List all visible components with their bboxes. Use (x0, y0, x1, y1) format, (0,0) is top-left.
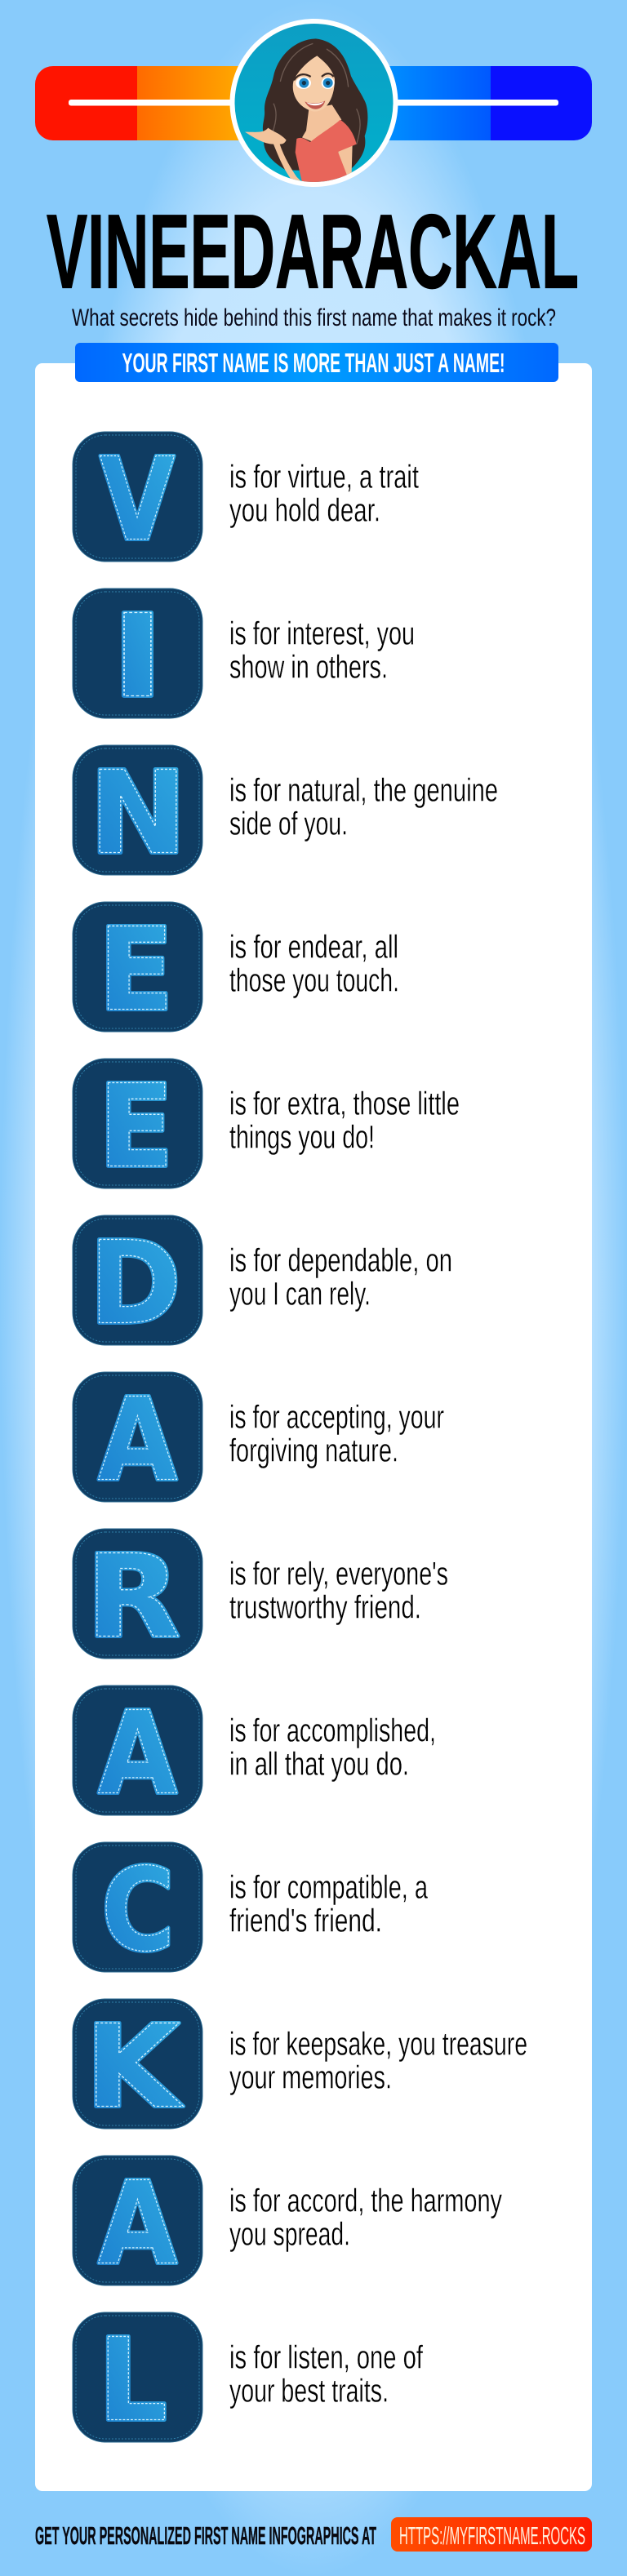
letter tile A: A (98, 1375, 177, 1507)
description A: is for accepting, your (229, 1399, 444, 1435)
letter tile E: E (98, 904, 174, 1037)
row: R (73, 1529, 448, 1663)
letter tile L (73, 2312, 202, 2447)
description A (229, 2183, 502, 2253)
letter tile E: E (98, 1061, 174, 1193)
letter tile C: C (101, 1845, 175, 1977)
letter tile E: E (98, 904, 174, 1037)
letter tile C (73, 1842, 202, 1977)
letter tile D: D (89, 1218, 181, 1350)
description I (229, 615, 415, 686)
letter tile A: A (98, 1688, 177, 1820)
description R (229, 1556, 448, 1626)
row: A third (73, 2156, 502, 2290)
description A: forgiving nature. (229, 1433, 398, 1469)
description E: is for endear, all (229, 929, 398, 965)
description K: your memories. (229, 2060, 392, 2096)
letter tile N: N (89, 748, 187, 880)
description D: you I can rely. (229, 1277, 371, 1312)
banner (75, 343, 558, 382)
description E (229, 929, 399, 999)
row: E second (73, 1059, 460, 1193)
letter tile L: L (98, 2315, 167, 2447)
letter tile E (73, 902, 202, 1037)
letter tile A: A (98, 2158, 177, 2290)
description E: those you touch. (229, 963, 399, 999)
description C: friend's friend. (229, 1903, 382, 1939)
description D: is for dependable, on (229, 1242, 452, 1278)
letter tile A: A (98, 1688, 177, 1820)
white line across bar (69, 100, 558, 106)
white content panel (35, 363, 592, 2491)
description E (229, 1086, 460, 1156)
row: V (73, 432, 419, 566)
header colour bar (35, 66, 592, 140)
letter tile E: E (98, 1061, 174, 1193)
letter tile A (73, 2156, 202, 2290)
description N: is for natural, the genuine (229, 772, 498, 808)
row: L (73, 2312, 424, 2447)
description A: is for accord, the harmony (229, 2183, 502, 2218)
row: E (73, 902, 399, 1037)
letter tile L: L (98, 2315, 167, 2447)
letter tile A: A (98, 1375, 177, 1507)
letter tile A (73, 1372, 202, 1507)
description V: is for virtue, a trait (229, 459, 419, 495)
description R: trustworthy friend. (229, 1590, 421, 1626)
description E: things you do! (229, 1120, 375, 1156)
row: A second (73, 1686, 436, 1820)
description V: you hold dear. (229, 493, 380, 529)
description E: is for extra, those little (229, 1086, 460, 1121)
letter tile R: R (86, 1531, 180, 1663)
letter tile K: K (85, 2001, 184, 2134)
row: C (73, 1842, 429, 1977)
letter tile V: V (100, 434, 175, 566)
row: N (73, 745, 498, 880)
letter tile R (73, 1529, 202, 1663)
row: A (73, 1372, 444, 1507)
letter tile I (73, 588, 202, 723)
description A: you spread. (229, 2217, 350, 2253)
description I: show in others. (229, 650, 388, 686)
letter tile C: C (101, 1845, 175, 1977)
letter tile N: N (89, 748, 187, 880)
description L (229, 2339, 424, 2409)
row: D (73, 1215, 452, 1350)
description R: is for rely, everyone's (229, 1556, 448, 1592)
description K (229, 2026, 527, 2096)
avatar portrait (230, 19, 398, 187)
letter tile A: A (98, 2158, 177, 2290)
letter tile D: D (89, 1218, 181, 1350)
letter tile E (73, 1059, 202, 1193)
description N: side of you. (229, 806, 348, 842)
letter tile I: I (111, 591, 164, 723)
letter tile V: V (100, 434, 175, 566)
footer url button (391, 2517, 592, 2552)
description A (229, 1399, 444, 1469)
description A (229, 1712, 436, 1783)
description A: is for accomplished, (229, 1712, 436, 1748)
description A: in all that you do. (229, 1747, 409, 1783)
letter tile K (73, 1999, 202, 2134)
description L: your best traits. (229, 2374, 389, 2409)
letter tile K: K (85, 2001, 184, 2134)
description N (229, 772, 498, 842)
row: K (73, 1999, 527, 2134)
letter tile V (73, 432, 202, 566)
letter tile A (73, 1686, 202, 1820)
letter tile R: R (86, 1531, 180, 1663)
description L: is for listen, one of (229, 2339, 424, 2375)
description C (229, 1869, 429, 1939)
row: I (73, 588, 415, 723)
description I: is for interest, you (229, 615, 415, 651)
letter tile I: I (111, 591, 164, 723)
description D (229, 1242, 452, 1312)
description C: is for compatible, a (229, 1869, 429, 1905)
description V (229, 459, 419, 529)
